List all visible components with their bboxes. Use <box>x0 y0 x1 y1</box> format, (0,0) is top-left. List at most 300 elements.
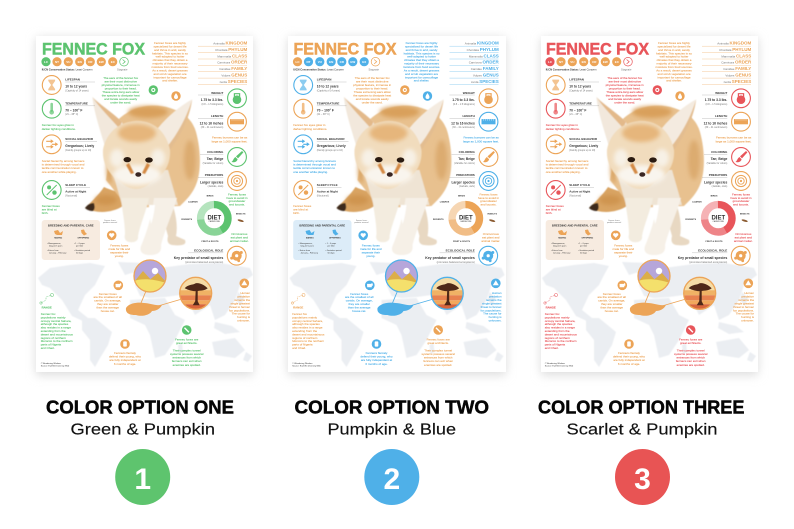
parenting fact: Fennecs fiercely <box>114 351 136 355</box>
taxonomy list: Mammalia <box>721 54 736 58</box>
range text: populations mainly <box>41 315 66 319</box>
ears text: under the sand. <box>110 100 131 104</box>
parenting fact: 6 months of age. <box>365 362 388 366</box>
breeding panel: MATING <box>306 237 314 240</box>
icon: tunnel <box>433 325 443 335</box>
world map <box>290 262 504 367</box>
size fact: are the smallest of all <box>94 295 122 299</box>
parenting fact: 6 months of age. <box>114 362 136 366</box>
length <box>450 112 498 131</box>
threat fact: single greatest <box>734 301 754 305</box>
conservation status scale: EX <box>615 60 619 64</box>
option two label: Pumpkin & Blue <box>328 422 456 438</box>
world map <box>38 262 253 367</box>
groundwater fact: and locusts. <box>480 202 497 206</box>
taxonomy list: Chordata <box>467 48 480 52</box>
sleep cycle: Active at Night <box>317 190 338 194</box>
poster: green and pumpkin <box>36 36 253 372</box>
ears text: the species to dissipate heat <box>102 94 140 98</box>
taxonomy list: CLASS <box>484 53 499 58</box>
weight: (0.8 – 1.5 kilograms) <box>202 103 223 106</box>
size fact: they are smaller <box>349 302 370 306</box>
range text: occupy central Sahara, <box>41 319 72 323</box>
threat fact: The cause for <box>483 312 502 316</box>
lifespan <box>294 76 346 94</box>
breeding panel: • 1 – 6 pups <box>326 243 336 245</box>
taxonomy list: Canidae <box>471 67 483 71</box>
groundwater fact: Fennec foxes <box>732 193 751 197</box>
ecological role: (promotes balanced ecosystems) <box>689 260 727 264</box>
length: 12 to 16 inches <box>451 122 475 126</box>
temperature: 70 – 100° F <box>317 108 334 112</box>
range text: although the species <box>292 322 320 326</box>
mating fact: young. <box>115 254 124 258</box>
intro text: moisture from food sources. <box>655 65 693 69</box>
range text: regions of northern <box>41 336 66 340</box>
social behavior: Gregarious; Lively <box>317 144 346 148</box>
breeding panel: January – February <box>49 253 66 255</box>
range text: desert and mountainous <box>292 332 325 336</box>
size fact: than the average <box>96 305 119 309</box>
groundwater fact: groundwater <box>733 199 749 203</box>
taxonomy list: Carnivora <box>721 61 735 65</box>
lifespan <box>546 76 599 94</box>
ecological role: ECOLOGICAL ROLE <box>194 248 223 252</box>
range label <box>291 293 305 309</box>
badge 2 <box>364 449 419 505</box>
diet donut chart: BIRDS <box>711 195 718 197</box>
credit: © Wandering Wisdom <box>41 362 61 365</box>
sleep cycle: Active at Night <box>569 190 590 194</box>
parenting fact: are fully independent at <box>109 358 141 362</box>
taxonomy list: FAMILY <box>735 66 751 71</box>
weight: (0.8 – 1.5 kilograms) <box>453 103 475 106</box>
predators: Larger species <box>200 180 223 184</box>
social behavior: SOCIAL BEHAVIOR <box>569 137 598 141</box>
predators: (Jackals, owls) <box>712 185 727 188</box>
taxonomy list: Carnivora <box>469 61 483 65</box>
fox photo <box>589 97 704 255</box>
parenting fact: defend their young, who <box>360 355 393 359</box>
icon: cat <box>618 280 627 290</box>
taxonomy list: zerda <box>723 80 732 84</box>
taxonomy list: Canidae <box>723 67 735 71</box>
diet donut chart: DIET <box>711 215 725 221</box>
threat fact: threat to fennec <box>481 305 502 309</box>
icon: cat <box>114 280 123 290</box>
diet donut chart: FRUIT & ROOTS <box>201 241 219 243</box>
breeding panel: • Monogamous, <box>47 243 61 245</box>
temperature: TEMPERATURE <box>317 101 339 105</box>
coloring: COLORING <box>711 150 728 154</box>
threat fact: threat to fennec <box>229 305 250 309</box>
weight: 1.75 to 3.3 lbs. <box>201 98 223 102</box>
conservation status scale: EX <box>111 60 115 64</box>
ears text: and locate sounds easily <box>356 97 389 101</box>
threat fact: remains the <box>234 298 250 302</box>
conservation status scale: EX <box>362 60 366 64</box>
blind at birth fact: are blind at <box>42 207 57 211</box>
social behavior: (Family groups up to 10) <box>65 149 91 152</box>
option one label: Green & Pumpkin <box>70 422 215 438</box>
coloring <box>704 148 750 166</box>
conservation status scale: IUCN Conservation Status: Least Concern <box>42 68 93 72</box>
length: LENGTH <box>211 114 223 118</box>
architects fact: enemies are spotted. <box>173 363 201 367</box>
architects fact: great architects. <box>428 341 449 345</box>
coloring: (Variable fur colors) <box>454 162 475 165</box>
coloring: Tan; Beige <box>711 157 727 161</box>
icon: water drop <box>675 91 685 101</box>
taxonomy list: ORDER <box>483 60 500 65</box>
range text: also resides in a range <box>41 326 71 330</box>
intro text: important for camouflage <box>405 75 438 79</box>
intro text: and shelter. <box>414 79 429 83</box>
range text: parts of Nigeria <box>292 343 313 347</box>
architects fact: systems possess several <box>170 352 204 356</box>
range text: populations mainly <box>545 315 570 319</box>
breeding panel: 50 days <box>76 253 83 255</box>
eye glow fact: darker lighting conditions. <box>546 127 580 131</box>
breeding panel: 50 days <box>580 253 587 255</box>
size fact: canids. On average, <box>94 299 121 303</box>
length: (30 – 41 centimeters) <box>452 126 475 129</box>
breeding panel: 50 days <box>328 253 335 255</box>
ears text: and locate sounds easily <box>104 97 138 101</box>
threat fact: hunting is <box>741 315 754 319</box>
architects fact: fennecs can exit when <box>172 359 202 363</box>
ears text: are their most distinctive <box>105 80 137 84</box>
intro text: and shelter. <box>162 79 178 83</box>
predator note: predator removal <box>103 221 118 224</box>
length: LENGTH <box>715 114 727 118</box>
weight: WEIGHT <box>715 91 727 95</box>
illustration: desert <box>134 260 166 292</box>
taxonomy list: KINGDOM <box>477 40 499 46</box>
size fact: Fennec foxes <box>350 292 369 296</box>
intro text: moisture from food sources. <box>403 65 440 69</box>
architects fact: enemies are spotted. <box>424 363 452 367</box>
breeding panel: BREEDING AND PARENTAL CARE <box>299 223 345 227</box>
mating fact: separate their <box>110 250 128 254</box>
architects fact: great architects. <box>680 341 702 345</box>
conservation status scale: IUCN Conservation Status: Least Concern <box>546 68 597 72</box>
intro text: climates that they obtain a <box>153 58 188 62</box>
range label: RANGE <box>42 305 52 309</box>
icon: warning <box>491 278 501 288</box>
size fact: house cat. <box>352 309 366 313</box>
social behavior: Gregarious; Lively <box>569 144 598 148</box>
architects fact: enemies are spotted. <box>677 363 705 367</box>
breeding panel: • Monogamous, <box>551 243 565 245</box>
burrow fact: Fennec burrows can be as <box>212 136 248 140</box>
intro text: majority of their necessary <box>152 62 188 66</box>
title: FENNEC FOX <box>294 40 397 58</box>
taxonomy list: Animalia <box>465 42 477 46</box>
social hierarchy fact: one another while playing. <box>42 170 77 174</box>
ecological role: (promotes balanced ecosystems) <box>185 260 223 264</box>
conservation status scale: NT <box>559 60 563 64</box>
groundwater fact: groundwater <box>229 199 245 203</box>
weight: 1.75 to 3.3 lbs. <box>452 98 475 102</box>
range text: Fennec fox <box>292 312 308 316</box>
temperature <box>42 99 95 118</box>
lifespan: LIFESPAN <box>569 78 584 82</box>
social hierarchy fact: tactile communication known to <box>42 166 84 170</box>
ecological role: Key predator of small species <box>174 256 223 260</box>
ecological role <box>425 246 498 265</box>
intro text: well-adapted to hotter <box>156 55 184 59</box>
intro text: specialized for desert life <box>657 44 691 48</box>
architects fact: Their complex tunnel <box>677 348 705 352</box>
predators: (Jackals, owls) <box>459 185 475 188</box>
conservation status scale: NT <box>306 60 311 64</box>
diet donut chart: INSECTS <box>740 214 750 216</box>
omnivore fact: eat plant and <box>231 235 248 239</box>
icon: young <box>624 339 634 349</box>
mating fact: separate their <box>614 250 632 254</box>
social behavior <box>546 135 601 154</box>
breeding panel: OFFSPRING <box>77 238 90 240</box>
architects fact: Their complex tunnel <box>173 348 201 352</box>
intro text: As a result, desert grasses <box>404 68 440 72</box>
taxonomy list: Chordata <box>719 48 732 52</box>
breeding panel: long-term pairs <box>300 245 314 248</box>
intro text: habitats. This species is so <box>656 51 692 55</box>
illustration: savanna <box>180 277 212 309</box>
burrow fact: Fennec burrows can be as <box>716 136 752 140</box>
threat fact: Human <box>744 291 754 295</box>
icon: ear <box>653 85 662 95</box>
taxonomy list <box>198 40 248 84</box>
breeding panel: per litter <box>76 245 84 248</box>
social hierarchy fact: Social hierarchy among fennecs <box>42 159 85 163</box>
parenting fact: defend their young, who <box>109 355 141 359</box>
breeding panel: long-term pairs <box>553 245 566 248</box>
breeding panel <box>42 220 100 260</box>
breeding panel: per litter <box>580 245 588 248</box>
icon: heart <box>358 230 368 240</box>
range text: although the species <box>41 322 69 326</box>
breeding panel: OFFSPRING <box>581 238 594 240</box>
range text: parts of Nigeria <box>545 343 565 347</box>
conservation status scale <box>545 57 632 72</box>
conservation status scale: VU <box>318 60 322 64</box>
option one label: COLOR OPTION ONE <box>46 397 234 417</box>
ears text: proportion to their head. <box>356 86 388 90</box>
coloring: COLORING <box>207 150 224 154</box>
intro text: Fennec foxes are highly <box>406 41 438 45</box>
weight: (0.8 – 1.5 kilograms) <box>706 103 727 106</box>
conservation status scale: EW <box>603 60 608 64</box>
ecological role <box>174 246 246 265</box>
taxonomy list: SPECIES <box>732 79 751 84</box>
threat fact: predation <box>741 294 754 298</box>
range blob and connectors <box>630 291 686 316</box>
size fact: than the average <box>348 305 371 309</box>
lifespan: 10 to 12 years <box>317 85 339 89</box>
icon: water drop <box>423 91 432 101</box>
omnivore fact: Omnivorous <box>483 232 499 236</box>
weight <box>702 89 750 108</box>
taxonomy list: GENUS <box>483 72 499 77</box>
breeding panel: • 1 – 6 pups <box>578 243 589 245</box>
sleep cycle: SLEEP CYCLE <box>317 183 338 187</box>
omnivore fact: eat plant and <box>735 235 752 239</box>
social behavior: (Family groups up to 10) <box>569 149 595 152</box>
intro text: important for camouflage <box>657 75 691 79</box>
ears text: physical feature, immense in <box>353 83 392 87</box>
diet donut chart: BIRDS <box>207 195 214 197</box>
option three label <box>538 397 744 438</box>
taxonomy list: Vulpes <box>473 73 483 77</box>
parenting fact: defend their young, who <box>613 355 645 359</box>
size fact: they are smaller <box>601 302 622 306</box>
range text: and Chad. <box>292 346 306 350</box>
diet donut chart: BIRDS <box>458 195 465 197</box>
conservation status scale: IUCN Conservation Status: Least Concern <box>293 68 345 72</box>
blind at birth fact: are blind at <box>293 207 308 211</box>
mating fact: separate their <box>362 250 380 254</box>
intro text: and scrub vegetation are <box>153 72 187 76</box>
omnivore fact: Omnivorous <box>735 232 752 236</box>
range text: regions of northern <box>545 336 570 340</box>
threat fact: single greatest <box>230 301 250 305</box>
architects fact: Fennec foxes are <box>679 337 703 341</box>
size fact: Fennec foxes <box>603 292 621 296</box>
intro text: majority of their necessary <box>656 62 692 66</box>
taxonomy list <box>702 40 752 84</box>
option three label: COLOR OPTION THREE <box>538 397 744 417</box>
blind at birth fact: birth. <box>293 211 300 215</box>
length: LENGTH <box>462 114 475 118</box>
fox photo <box>336 97 451 255</box>
conservation status scale: LC <box>548 60 553 64</box>
ears text: are their most distinctive <box>356 80 389 84</box>
taxonomy list: Mammalia <box>469 54 484 58</box>
coloring: COLORING <box>459 150 475 154</box>
architects fact: systems possess several <box>422 352 455 356</box>
predator note: Fennec foxes <box>356 220 367 222</box>
mating fact: young. <box>366 254 375 258</box>
eye glow fact: Fennec fox eyes glow in <box>546 123 578 127</box>
temperature: TEMPERATURE <box>569 101 592 105</box>
threat fact: fox populations. <box>229 308 250 312</box>
range text: parts of Nigeria <box>41 343 61 347</box>
taxonomy list: FAMILY <box>483 66 499 71</box>
intro text: majority of their necessary <box>404 62 440 66</box>
sleep cycle: SLEEP CYCLE <box>65 183 86 187</box>
sleep cycle: (Nocturnal) <box>317 195 329 198</box>
threat fact: hunting is <box>489 315 502 319</box>
size fact: are the smallest of all <box>345 295 374 299</box>
architects fact: entrances from which <box>676 356 705 360</box>
sleep cycle <box>42 181 90 199</box>
taxonomy list: Chordata <box>215 48 228 52</box>
range text: Morocco to the northern <box>41 339 73 343</box>
badge 3 <box>615 449 670 505</box>
weight: WEIGHT <box>211 91 223 95</box>
taxonomy list: GENUS <box>231 72 247 77</box>
range text: extending from the <box>545 329 570 333</box>
coloring: Tan; Beige <box>207 157 223 161</box>
architects fact: systems possess several <box>674 352 708 356</box>
option one label <box>46 397 234 438</box>
burrow fact: large as 1,000 square feet. <box>212 140 247 144</box>
breeding panel: MATING <box>54 237 63 240</box>
range text: and Chad. <box>545 346 559 350</box>
range blob and connectors <box>377 291 434 316</box>
ears text: under the sand. <box>614 100 635 104</box>
predators <box>198 172 246 190</box>
title: FENNEC FOX <box>546 40 649 58</box>
diet donut chart: RODENTS <box>685 219 697 221</box>
intro text: climates that they obtain a <box>404 58 439 62</box>
eye glow fact: darker lighting conditions. <box>42 127 76 131</box>
mating fact: mate for life and <box>109 247 130 251</box>
taxonomy list: Vulpes <box>221 73 231 77</box>
taxonomy list: GENUS <box>735 72 751 77</box>
taxonomy list: PHYLUM <box>480 47 499 52</box>
groundwater fact: and locusts. <box>229 202 245 206</box>
blind at birth fact: Fennec foxes <box>293 204 312 208</box>
conservation status scale: EW <box>99 60 104 64</box>
threat fact: remains the <box>486 298 502 302</box>
lifespan: (Captivity of 14 years) <box>317 89 340 92</box>
social behavior: SOCIAL BEHAVIOR <box>65 137 94 141</box>
range text: although the species <box>545 322 573 326</box>
ears text: These extra-long ears allow <box>606 90 644 94</box>
icon: tunnel <box>182 325 192 335</box>
icon: ear <box>400 85 410 95</box>
breeding panel: • Estrus from <box>298 249 310 252</box>
diet donut chart <box>433 195 497 243</box>
predators <box>450 172 498 190</box>
range text: Morocco to the northern <box>292 339 324 343</box>
ears text: and locate sounds easily <box>608 97 642 101</box>
omnivore fact: animal matter. <box>734 239 753 243</box>
predators: (Jackals, owls) <box>208 185 223 188</box>
sleep cycle: (Nocturnal) <box>569 195 581 198</box>
intro text: climates that they obtain a <box>657 58 692 62</box>
groundwater fact: have to avoid in <box>226 196 248 200</box>
range text: extending from the <box>292 329 317 333</box>
social hierarchy fact: Social hierarchy among fennecs <box>293 159 336 163</box>
taxonomy list: zerda <box>219 80 228 84</box>
blind at birth fact: birth. <box>546 211 553 215</box>
threat fact: unknown. <box>741 319 754 323</box>
taxonomy list <box>450 40 500 84</box>
intro text: important for camouflage <box>153 75 187 79</box>
diet donut chart: DIET <box>207 215 221 221</box>
badge 2: 2 <box>383 463 400 496</box>
range label: RANGE <box>546 305 556 309</box>
credit: © Wandering Wisdom <box>292 362 313 365</box>
taxonomy list: SPECIES <box>228 79 247 84</box>
breeding panel: long-term pairs <box>49 245 62 248</box>
ecological role: Key predator of small species <box>678 256 727 260</box>
social behavior <box>42 135 97 154</box>
social hierarchy fact: tactile communication known to <box>293 166 335 170</box>
parenting fact: Fennecs fiercely <box>618 351 640 355</box>
size fact: Fennec foxes <box>99 292 117 296</box>
architects fact: Their complex tunnel <box>424 348 452 352</box>
length: 12 to 16 inches <box>704 122 727 126</box>
range text: desert and mountainous <box>41 332 73 336</box>
range text: also resides in a range <box>292 326 323 330</box>
threat fact: predation <box>489 294 502 298</box>
burrow fact: Fennec burrows can be as <box>463 136 499 140</box>
